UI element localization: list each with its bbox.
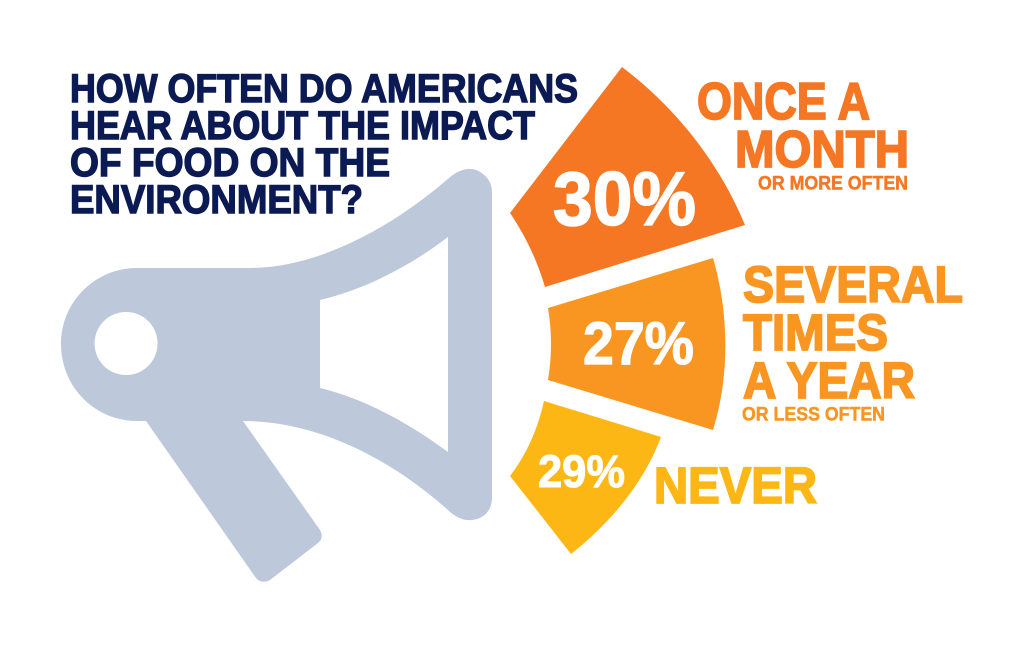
label: once a month: ONCE A: [697, 73, 870, 131]
icon: megaphone: [61, 169, 492, 582]
label: several times a year: SEVERAL: [743, 256, 963, 313]
segment: 30 percent: [510, 67, 745, 287]
value: 30%: 30%: [553, 157, 696, 242]
value: 27%: 27%: [583, 310, 694, 377]
title: HEAR ABOUT THE IMPACT: [70, 104, 535, 148]
title: ENVIRONMENT?: [70, 178, 363, 222]
label: several times a year: [742, 256, 963, 426]
label: several times a year: OR LESS OFTEN: [742, 404, 885, 426]
value: 29%: 29%: [538, 446, 625, 497]
title: [70, 67, 578, 222]
segment: 27 percent: [548, 258, 725, 430]
label: never: NEVER: [654, 457, 817, 514]
segment: 29 percent: [510, 401, 661, 554]
label: several times a year: A YEAR: [743, 352, 915, 409]
label: once a month: [697, 73, 909, 194]
label: once a month: MONTH: [735, 121, 909, 179]
title: HOW OFTEN DO AMERICANS: [70, 67, 578, 111]
label: several times a year: TIMES: [743, 304, 888, 361]
label: once a month: OR MORE OFTEN: [758, 174, 908, 194]
title: OF FOOD ON THE: [70, 141, 390, 185]
